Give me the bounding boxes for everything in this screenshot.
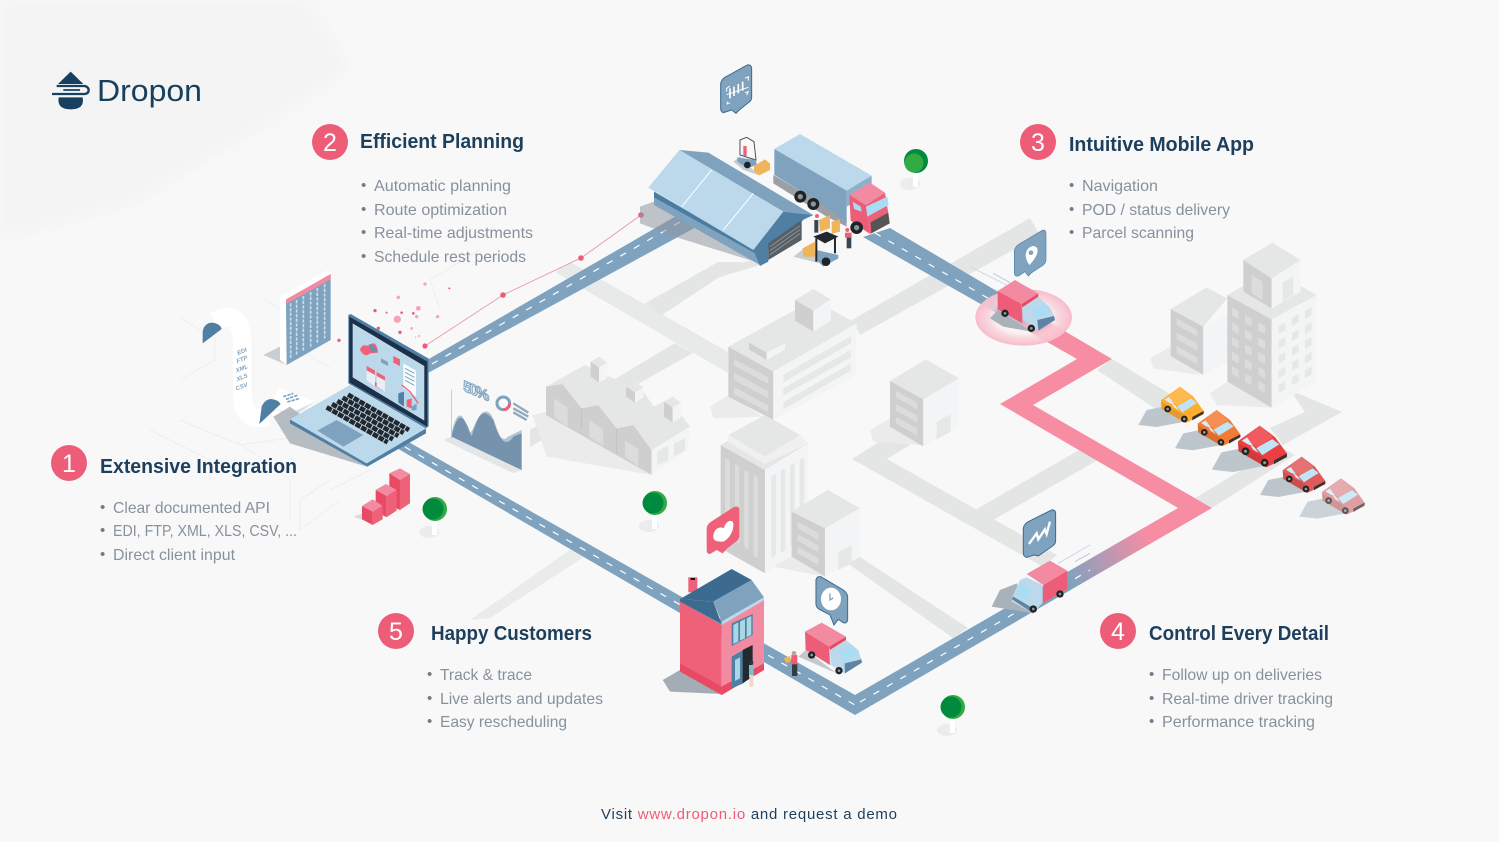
- heading 5: Happy Customers: [431, 623, 592, 645]
- number badge 1: [51, 445, 87, 481]
- laptop: [273, 314, 429, 467]
- logo wordmark: Dropon: [97, 73, 202, 108]
- list 3: •: [1069, 224, 1074, 241]
- section 1: Extensive Integration: [51, 445, 297, 564]
- list 4: •: [1149, 713, 1154, 730]
- paper scroll with formats: EDI: [236, 347, 248, 357]
- paper scroll with formats: XLS: [235, 373, 249, 384]
- gray streets: [470, 218, 1342, 638]
- list 1: •: [100, 546, 105, 563]
- list 1: [100, 499, 297, 564]
- list 4: Real-time driver tracking: [1162, 691, 1333, 708]
- forklift with boxes and workers: [793, 214, 852, 267]
- list 4: [1149, 666, 1333, 731]
- tag: clock: [816, 577, 848, 625]
- small building front: [773, 490, 860, 577]
- tree: [639, 491, 667, 532]
- section 2: Efficient Planning: [312, 124, 533, 266]
- list 4: •: [1149, 690, 1154, 707]
- number badge 4: 4: [1111, 618, 1125, 646]
- list 5: Live alerts and updates: [440, 691, 603, 708]
- list 1: Clear documented API: [113, 500, 270, 517]
- forklift on roof: [733, 137, 770, 175]
- heading 1: Extensive Integration: [100, 456, 297, 478]
- delivery van on ring: [970, 267, 1072, 346]
- circuit lines: [150, 250, 480, 530]
- number badge 2: [312, 124, 348, 160]
- car: dark orange: [1175, 410, 1240, 450]
- warehouse: [640, 150, 813, 280]
- list 2: Automatic planning: [374, 178, 511, 195]
- small building right: [870, 359, 959, 447]
- list 2: Schedule rest periods: [374, 249, 526, 266]
- list 2: Route optimization: [374, 202, 507, 219]
- paper scroll with formats: FTP: [236, 355, 249, 365]
- list 3: [1069, 177, 1230, 242]
- tree: [419, 497, 447, 538]
- logo icon: [52, 72, 89, 109]
- car: pale red: [1299, 478, 1365, 519]
- list 2: •: [361, 177, 366, 194]
- heading 3: Intuitive Mobile App: [1069, 134, 1254, 156]
- area chart with 50%: 50%: [463, 378, 489, 405]
- number badge 1: 1: [62, 450, 76, 478]
- list 5: Track & trace: [440, 667, 532, 684]
- list 3: POD / status delivery: [1082, 202, 1230, 219]
- list 5: •: [427, 690, 432, 707]
- road: corner to pink bend: [855, 508, 1212, 715]
- list 3: •: [1069, 201, 1074, 218]
- logo: [52, 72, 202, 109]
- road: warehouse to delivery van: [863, 228, 1112, 359]
- delivery van right: [992, 545, 1090, 613]
- section 3: Intuitive Mobile App: [1020, 124, 1254, 242]
- terraced houses: [532, 357, 690, 475]
- list 4: •: [1149, 666, 1154, 683]
- list 5: Easy rescheduling: [440, 714, 567, 731]
- tree: [900, 149, 928, 190]
- list 2: •: [361, 248, 366, 265]
- paper scroll with formats: [203, 317, 315, 424]
- number badge 2: 2: [323, 129, 337, 157]
- blue road: laptop to warehouse: [427, 208, 700, 373]
- number badge 3: 3: [1031, 129, 1045, 157]
- list 2: [361, 177, 533, 266]
- list 2: •: [361, 201, 366, 218]
- list 1: •: [100, 522, 105, 539]
- number badge 4: [1100, 613, 1136, 649]
- list 5: [427, 666, 603, 731]
- footer: Visit www.dropon.io and request a demo: [601, 806, 897, 823]
- number badge 5: [378, 613, 414, 649]
- list 5: •: [427, 713, 432, 730]
- faint top-left texture: [0, 0, 350, 240]
- tag: location pin: [1014, 230, 1046, 276]
- list 2: •: [361, 224, 366, 241]
- list 3: Parcel scanning: [1082, 225, 1194, 242]
- lorry: [773, 134, 890, 234]
- car: orange: [1138, 387, 1204, 427]
- list 4: Follow up on deliveries: [1162, 667, 1322, 684]
- office building: [710, 289, 857, 420]
- number badge 3: [1020, 124, 1056, 160]
- list 1: Direct client input: [113, 547, 236, 564]
- list 2: Real-time adjustments: [374, 225, 533, 242]
- scatter dots: [337, 282, 450, 342]
- section 5: Happy Customers: [378, 613, 603, 731]
- number badge 5: 5: [389, 618, 403, 646]
- heading 2: Efficient Planning: [360, 131, 524, 153]
- road: laptop to house to corner: [395, 440, 855, 715]
- tree: [937, 695, 965, 736]
- heading 4: Control Every Detail: [1149, 623, 1329, 645]
- queue of cars: [1138, 387, 1365, 519]
- tag: analytics: [1023, 510, 1056, 557]
- delivery van with courier: [784, 623, 862, 676]
- document panel: [263, 270, 331, 365]
- paper scroll with formats: XML: [234, 364, 249, 375]
- car: red: [1212, 426, 1287, 472]
- area chart with 50%: [443, 378, 528, 473]
- bars: [353, 468, 410, 525]
- paper scroll with formats: CSV: [235, 382, 250, 393]
- skyscraper group: [1150, 243, 1317, 408]
- list 1: •: [100, 499, 105, 516]
- pink route: [1000, 359, 1212, 508]
- list 3: •: [1069, 177, 1074, 194]
- house: [663, 569, 764, 695]
- list 5: •: [427, 666, 432, 683]
- list 3: Navigation: [1082, 178, 1158, 195]
- connection line with dots: [422, 212, 644, 349]
- car: faded red: [1260, 457, 1325, 497]
- tag: heart: [707, 507, 739, 554]
- tag: barcode: [721, 65, 752, 113]
- tower: [721, 415, 808, 573]
- list 1: EDI, FTP, XML, XLS, CSV, ...: [113, 523, 297, 540]
- list 4: Performance tracking: [1162, 714, 1315, 731]
- section 4: Control Every Detail: [1100, 613, 1333, 731]
